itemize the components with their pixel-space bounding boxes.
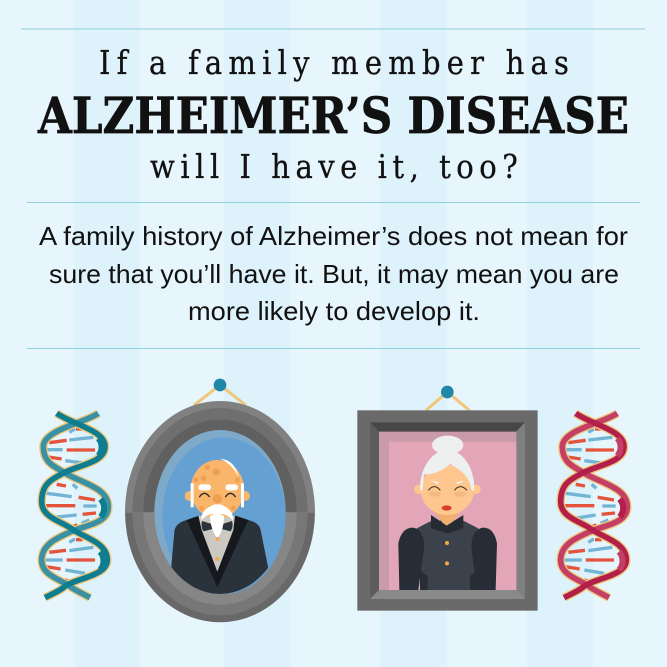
eyebrows <box>431 481 464 484</box>
ears <box>185 491 250 501</box>
hair and shine <box>191 459 244 507</box>
icon: hanging wire and pin <box>426 386 469 410</box>
oval portrait of grandfather <box>125 379 315 622</box>
neck <box>435 512 460 530</box>
icon: crimson DNA helix <box>561 413 627 598</box>
intro text block <box>39 221 628 326</box>
age spots <box>194 465 240 511</box>
grandfather figure <box>171 459 269 600</box>
intro text block: more likely to develop it. <box>188 296 480 326</box>
buttons <box>215 537 219 561</box>
grandmother figure <box>398 436 497 590</box>
lower skirt panels <box>420 567 477 590</box>
puff sleeves <box>398 528 497 590</box>
icon: teal DNA helix <box>42 413 108 598</box>
intro text block: sure that you’ll have it. But, it may mean you are <box>49 259 619 289</box>
dress <box>417 521 478 590</box>
buttons <box>445 541 449 565</box>
shirt <box>198 516 235 572</box>
hair <box>420 436 474 491</box>
lapels <box>187 516 248 587</box>
moustache and beard <box>201 504 233 538</box>
rectangular portrait of grandmother <box>357 386 538 611</box>
square frame <box>357 410 538 611</box>
cheeks <box>429 491 466 497</box>
jacket <box>171 516 269 600</box>
ears <box>414 485 481 494</box>
collar <box>431 515 463 533</box>
portrait background <box>379 432 516 590</box>
head <box>191 460 244 519</box>
face <box>421 465 474 515</box>
lips <box>442 505 452 511</box>
bow tie <box>202 521 233 531</box>
title <box>37 44 629 186</box>
eyes <box>429 487 467 490</box>
oval frame <box>125 401 315 622</box>
portrait background <box>154 430 286 594</box>
eyes <box>200 493 235 497</box>
title: If a family member has <box>99 44 569 82</box>
intro text block: A family history of Alzheimer’s does not mean for <box>39 221 628 251</box>
title: will I have it, too? <box>150 148 518 186</box>
icon: hanging wire and pin <box>194 379 246 405</box>
